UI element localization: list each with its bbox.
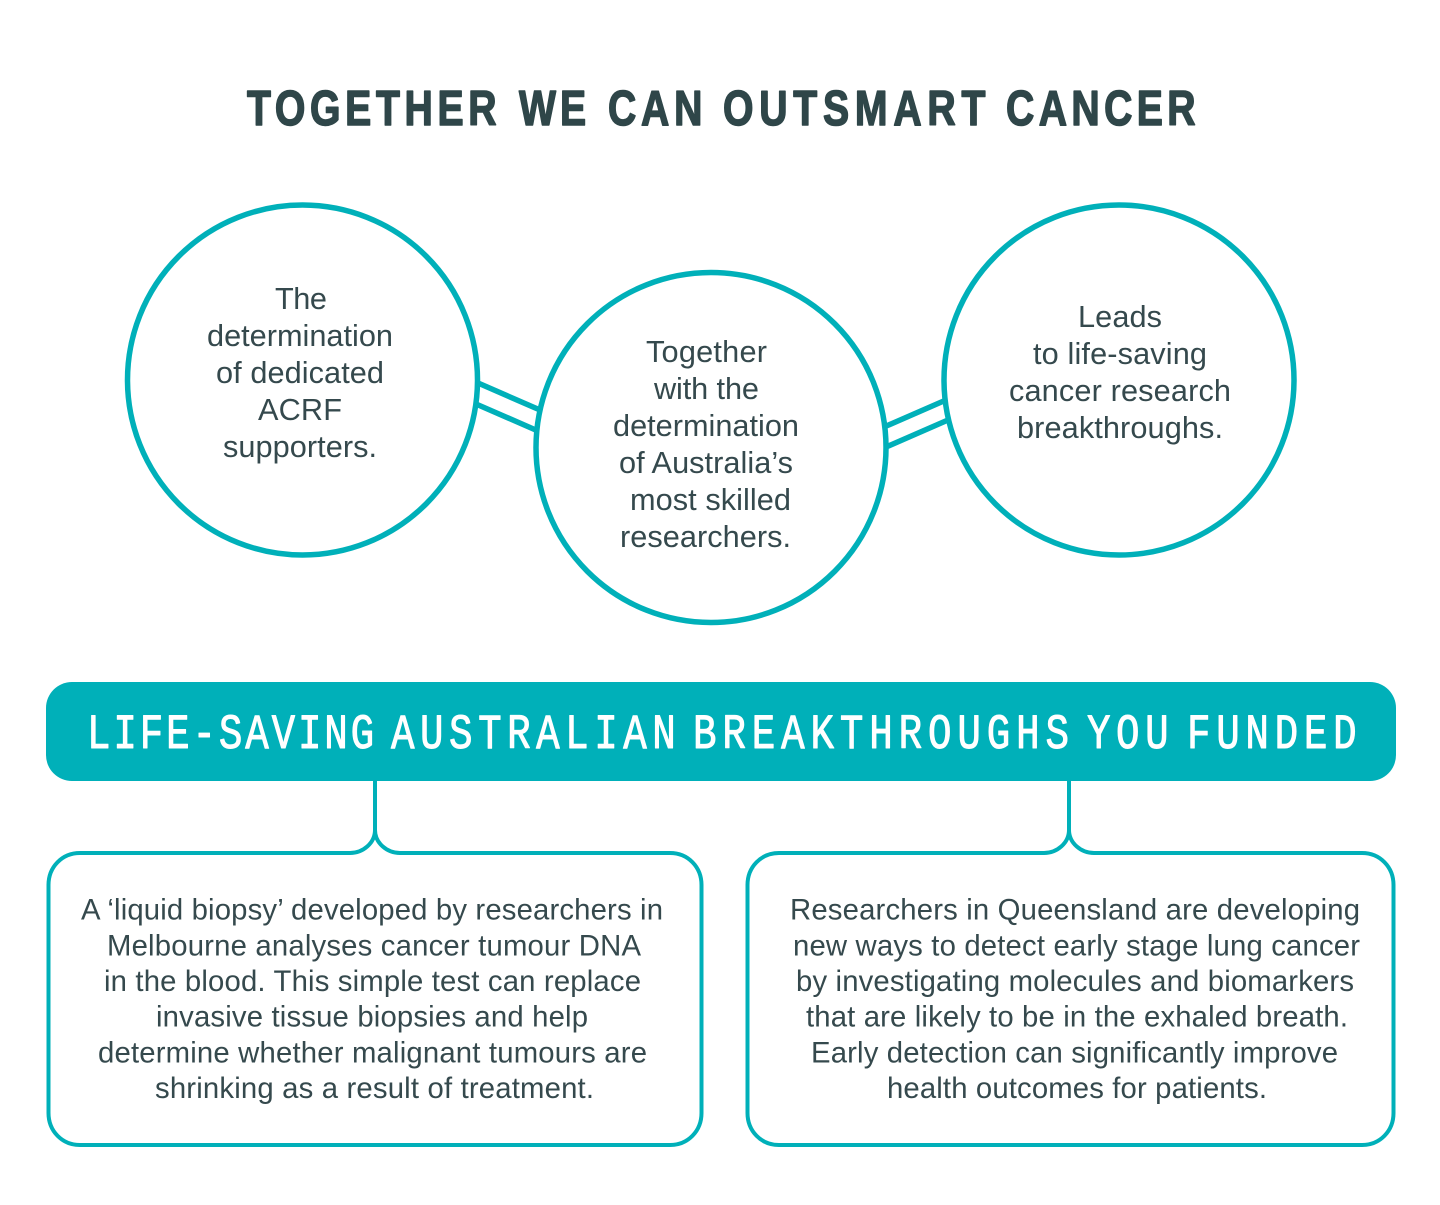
panel: centre circle bbox=[536, 272, 886, 622]
banner: breakthroughs heading bbox=[46, 682, 1396, 781]
panel: right circle: Leads bbox=[1078, 299, 1162, 334]
panel: centre circle: with the bbox=[653, 371, 759, 406]
panel: left circle: of dedicated bbox=[216, 355, 384, 390]
panel: left circle bbox=[128, 205, 478, 555]
panel: left circle: determination bbox=[207, 318, 393, 353]
banner: breakthroughs heading: LIFE-SAVING bbox=[87, 708, 374, 763]
panel: centre circle: of Australia’s bbox=[619, 445, 793, 480]
panel: Melbourne liquid biopsy: determine whether malignant tumours are bbox=[98, 1036, 647, 1070]
banner: breakthroughs heading: FUNDED bbox=[1187, 708, 1357, 763]
title: TOGETHER bbox=[247, 82, 497, 136]
title: CANCER bbox=[1006, 82, 1196, 136]
panel: Melbourne liquid biopsy: A ‘liquid biopsy’ developed by researchers in bbox=[81, 894, 663, 926]
panel: centre circle: researchers. bbox=[620, 519, 791, 554]
panel: Melbourne liquid biopsy: invasive tissue biopsies and help bbox=[156, 1000, 588, 1034]
panel: Queensland lung cancer detection: health outcomes for patients. bbox=[887, 1072, 1267, 1105]
panel: Queensland lung cancer detection: new ways to detect early stage lung cancer bbox=[793, 930, 1360, 962]
panel: Queensland lung cancer detection: by investigating molecules and biomarkers bbox=[796, 965, 1354, 998]
banner: breakthroughs heading: BREAKTHROUGHS bbox=[693, 708, 1069, 763]
connector: centre to right circle bbox=[884, 400, 948, 447]
panel: centre circle: Together bbox=[646, 334, 767, 369]
banner: breakthroughs heading: YOU bbox=[1087, 708, 1169, 763]
banner: breakthroughs heading: AUSTRALIAN bbox=[391, 708, 676, 763]
panel: Melbourne liquid biopsy bbox=[48, 778, 702, 1145]
panel: Queensland lung cancer detection: that are likely to be in the exhaled breath. bbox=[806, 1000, 1348, 1034]
panel: Melbourne liquid biopsy: shrinking as a result of treatment. bbox=[155, 1072, 594, 1105]
panel: Melbourne liquid biopsy: Melbourne analyses cancer tumour DNA bbox=[107, 930, 641, 962]
panel: right circle bbox=[944, 205, 1294, 555]
panel: right circle: breakthroughs. bbox=[1017, 410, 1223, 445]
title: WE bbox=[519, 82, 586, 136]
panel: Melbourne liquid biopsy: in the blood. This simple test can replace bbox=[104, 965, 641, 998]
connector: left to centre circle bbox=[476, 383, 540, 431]
panel: Queensland lung cancer detection: Early detection can significantly improve bbox=[811, 1036, 1338, 1070]
title bbox=[247, 82, 1196, 136]
title: OUTSMART bbox=[723, 82, 985, 136]
panel: right circle: cancer research bbox=[1009, 373, 1231, 408]
panel: Queensland lung cancer detection: Researchers in Queensland are developing bbox=[790, 894, 1360, 926]
title: CAN bbox=[608, 82, 702, 136]
panel: right circle: to life-saving bbox=[1033, 336, 1207, 371]
panel: left circle: The bbox=[275, 281, 327, 316]
panel: Queensland lung cancer detection bbox=[748, 778, 1394, 1145]
panel: centre circle: most skilled bbox=[630, 482, 791, 517]
panel: left circle: ACRF bbox=[258, 392, 342, 427]
panel: left circle: supporters. bbox=[223, 429, 377, 464]
panel: centre circle: determination bbox=[613, 408, 799, 443]
